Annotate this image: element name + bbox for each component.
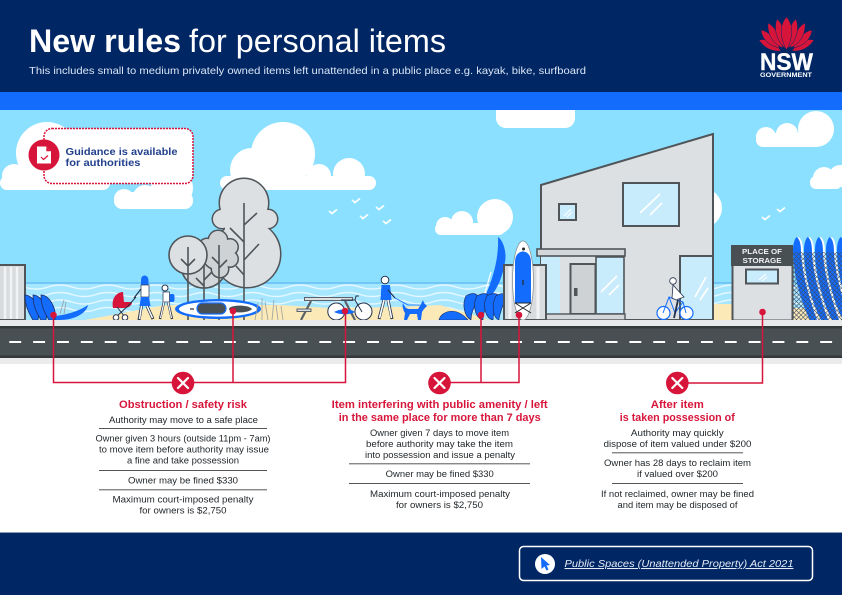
guidance callout: Guidance is available: [66, 147, 178, 158]
trees: [169, 179, 280, 320]
rule text: for owners is $2,750: [396, 500, 483, 510]
place of storage: PLACE OF: [742, 247, 783, 256]
title: New rules: [29, 23, 181, 59]
rule text: [349, 428, 530, 510]
right glass: [680, 256, 713, 320]
parked bicycle: [328, 296, 372, 320]
column: public amenity: [332, 372, 548, 510]
awning: [537, 249, 625, 256]
rule text: Owner given 7 days to move item: [370, 428, 509, 438]
rule text: Owner may be fined $330: [386, 469, 494, 479]
rule text: and item may be disposed of: [618, 500, 738, 510]
title: [29, 23, 446, 59]
rule text: [96, 415, 270, 516]
rule text: [601, 428, 754, 510]
guidance callout: for authorities: [66, 158, 141, 169]
entry window: [596, 257, 624, 314]
link text: Public Spaces (Unattended Property) Act 2021: [564, 558, 794, 570]
paddleboard: [512, 241, 534, 320]
title: for personal items: [189, 23, 446, 59]
rule text: Authority may quickly: [631, 428, 724, 438]
legislation link button: [520, 546, 812, 580]
rule text: to move item before authority may issue: [99, 445, 269, 455]
icon: cross: [428, 372, 451, 394]
person: child with backpack: [160, 285, 174, 319]
rule text: into possession and issue a penalty: [365, 450, 516, 460]
tree: back round: [181, 242, 227, 320]
heading: in the same place for more than 7 days: [339, 412, 541, 424]
step: [537, 314, 625, 320]
rule text: Owner given 3 hours (outside 11pm - 7am): [96, 434, 270, 444]
footpath and road: [0, 320, 842, 364]
rule text: before authority may take the item: [366, 439, 513, 449]
connector: storage: [688, 309, 766, 383]
tree: scalloped: [199, 231, 238, 320]
person on bicycle: [657, 278, 693, 320]
rule text: dispose of item valued under $200: [604, 439, 751, 449]
icon: cursor: [535, 554, 555, 574]
dog and leash: [395, 298, 427, 320]
connector: amenity: [450, 312, 522, 382]
kayak: centre: [175, 299, 261, 319]
building: [537, 134, 713, 320]
place of storage: [731, 245, 793, 320]
footer band: [0, 532, 842, 595]
large window: [623, 183, 679, 226]
illustration: sky and beach: [0, 110, 842, 320]
wall: [541, 134, 713, 320]
NSW Government logo: [759, 17, 814, 79]
kayaks: left stack: [25, 295, 88, 320]
beach grass: [60, 298, 283, 320]
heading: [620, 399, 735, 424]
stroller: [113, 292, 136, 320]
heading: After item: [651, 399, 704, 411]
connector: obstruction: [50, 308, 348, 382]
tree: large: [213, 179, 280, 320]
rule text: Authority may move to a safe place: [109, 415, 258, 425]
rule text: if valued over $200: [637, 469, 718, 479]
rule text: Owner may be fined $330: [128, 476, 238, 486]
rule text: a fine and take possession: [127, 456, 239, 466]
birds: [329, 198, 785, 224]
header band: [0, 0, 842, 110]
fenced surfboards: [793, 237, 842, 320]
rule text: If not reclaimed, owner may be fined: [601, 489, 754, 499]
person: woman walking: [134, 276, 153, 320]
ground-floor left glass: [541, 256, 560, 314]
heading: Item interfering with public amenity / left: [332, 399, 548, 411]
left shed: [0, 265, 25, 320]
column: after possession: [601, 372, 754, 510]
column: obstruction / safety risk: [96, 372, 270, 516]
kayaks: right stack: [439, 237, 506, 320]
icon: cross: [172, 372, 194, 394]
rule text: Owner has 28 days to reclaim item: [604, 458, 751, 468]
shed beside building: [504, 265, 546, 320]
picnic table: [297, 298, 355, 320]
rule text: for owners is $2,750: [140, 506, 226, 516]
tree: front round: [169, 236, 207, 320]
heading: Obstruction / safety risk: [119, 399, 248, 411]
icon: cross: [666, 372, 689, 394]
person: dog walker: [379, 276, 395, 319]
place of storage: STORAGE: [742, 256, 782, 265]
clouds: [0, 100, 842, 235]
NSW Government logo: NSW: [760, 49, 813, 76]
guidance callout: [28, 128, 193, 184]
rule text: Maximum court-imposed penalty: [370, 489, 511, 499]
NSW Government logo: GOVERNMENT: [760, 72, 812, 79]
heading: is taken possession of: [620, 412, 735, 424]
rule text: Maximum court-imposed penalty: [112, 495, 254, 505]
door: [570, 264, 596, 314]
heading: [332, 399, 548, 424]
subtitle: This includes small to medium privately owned items left unattended in a public place e.g. kayak, bike, surfboard: [29, 65, 586, 77]
small window: [559, 204, 576, 220]
